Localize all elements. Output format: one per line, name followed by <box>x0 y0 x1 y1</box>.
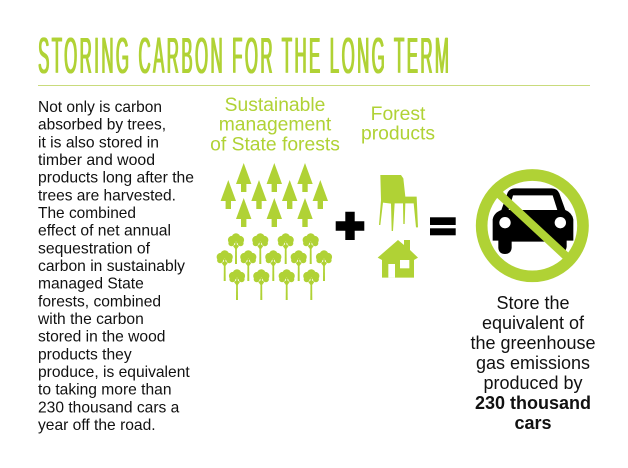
body text: managed State <box>38 276 144 293</box>
heading: sustainable management: of State forests <box>210 134 340 156</box>
heading: forest products: Forest <box>371 104 426 125</box>
caption: store the equivalent: equivalent of <box>482 313 585 333</box>
icon: equals sign <box>430 217 456 235</box>
icon: plus sign <box>336 212 364 240</box>
title: STORING CARBON FOR THE LONG TERM <box>38 29 448 85</box>
body text: carbon in sustainably <box>38 258 185 275</box>
body text: year off the road. <box>38 417 156 434</box>
body text: products they <box>38 346 132 363</box>
body text: with the carbon <box>37 311 144 328</box>
icon: house <box>378 240 418 278</box>
body text: produce, is equivalent <box>38 364 190 381</box>
body text: trees are harvested. <box>38 187 176 204</box>
body text: sequestration of <box>38 240 151 257</box>
caption: store the equivalent: 230 thousand <box>475 393 591 413</box>
body text <box>37 99 194 434</box>
body text: forests, combined <box>38 293 161 310</box>
icon: no cars sign <box>482 175 583 276</box>
body text: 230 thousand cars a <box>38 399 180 416</box>
body text: timber and wood <box>38 152 155 169</box>
caption: store the equivalent: gas emissions <box>476 353 590 373</box>
icon: chair <box>379 175 418 231</box>
body text: stored in the wood <box>38 329 165 346</box>
caption: store the equivalent: produced by <box>483 373 583 393</box>
heading: sustainable management: management <box>219 114 332 136</box>
body text: The combined <box>38 205 136 222</box>
heading: sustainable management: Sustainable <box>225 95 325 116</box>
caption: store the equivalent: Store the <box>496 293 570 313</box>
caption: store the equivalent <box>470 293 596 433</box>
body text: absorbed by trees, <box>38 117 166 134</box>
icon group: broadleaf trees <box>217 233 332 300</box>
heading: sustainable management <box>210 95 340 156</box>
body text: effect of net annual <box>38 223 171 240</box>
icon: car <box>493 188 573 254</box>
heading: forest products <box>361 104 435 144</box>
caption: store the equivalent: the greenhouse <box>470 333 596 353</box>
icon group: conifer trees <box>221 163 328 227</box>
heading: forest products: products <box>361 124 435 144</box>
caption: store the equivalent: cars <box>514 413 552 433</box>
body text: to taking more than <box>38 382 172 399</box>
body text: it is also stored in <box>38 134 159 151</box>
body text: products long after the <box>38 170 194 187</box>
body text: Not only is carbon <box>38 99 162 116</box>
